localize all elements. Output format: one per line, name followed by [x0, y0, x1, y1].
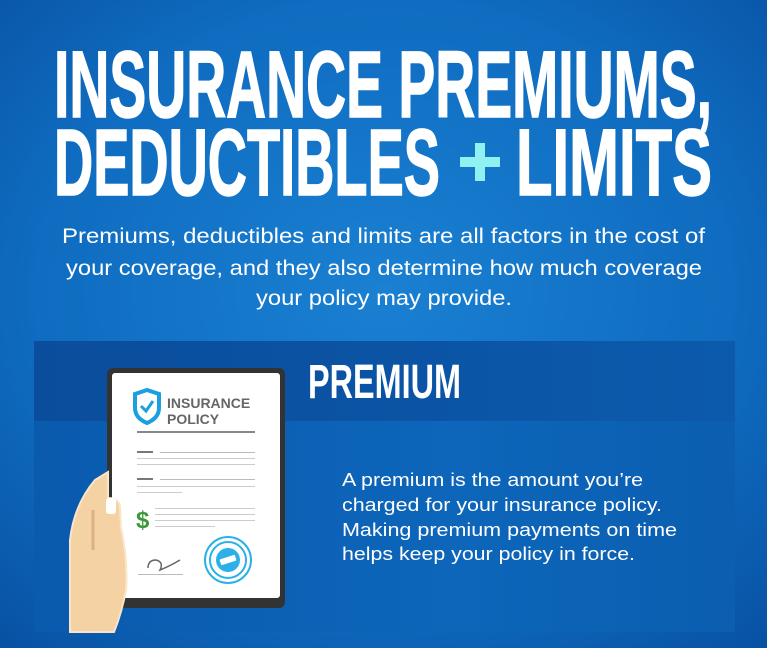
icon: tablet with insurance policy [107, 368, 285, 608]
text block: premium definition: charged for your insurance policy. [342, 495, 662, 515]
subtitle: Premiums, deductibles and limits are all factors in the cost of [62, 225, 705, 248]
title: DEDUCTIBLES [54, 110, 440, 216]
panel: premium [34, 341, 735, 632]
text block: premium definition: helps keep your policy in force. [342, 544, 635, 564]
text block: premium definition [342, 470, 677, 564]
subtitle [62, 225, 705, 310]
heading: premium: PREMIUM [308, 356, 461, 409]
subtitle: your policy may provide. [256, 287, 512, 310]
icon: stamp [205, 537, 251, 583]
text block: premium definition: Making premium payments on time [342, 520, 677, 540]
icon: shield [135, 390, 159, 423]
plus sign [460, 143, 500, 181]
text block: premium definition: A premium is the amount you’re [342, 470, 643, 490]
icon: tablet with insurance policy: POLICY [167, 411, 220, 427]
icon: tablet with insurance policy: INSURANCE [167, 395, 250, 411]
title [54, 32, 712, 216]
subtitle: your coverage, and they also determine how much coverage [66, 257, 702, 280]
icon: hand [70, 472, 126, 632]
icon: tablet with insurance policy: $ [136, 507, 150, 534]
